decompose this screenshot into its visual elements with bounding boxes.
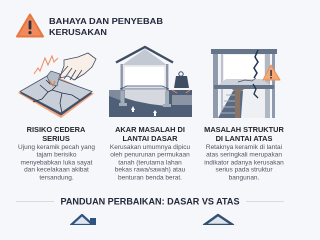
icon: house upper floor — [204, 215, 233, 225]
panel: ground floor text: bekas rawa/sawah) atau — [115, 167, 186, 174]
panel: upper floor text: atas seringkali merupakan — [206, 152, 282, 159]
panel: risk text: RISIKO CEDERA — [27, 125, 86, 134]
panel: upper floor text: Retaknya keramik di lantai — [206, 144, 282, 151]
panel: ground floor text: benturan benda berat. — [118, 175, 182, 182]
icon: house with foundation problem — [109, 47, 192, 117]
panel: ground floor text: AKAR MASALAH DI — [115, 125, 185, 134]
title: BAHAYA DAN PENYEBAB — [49, 16, 163, 26]
panel: ground floor text: tanah (terutama lahan — [118, 159, 182, 166]
panel: ground floor text: Kerusakan umumnya dipicu — [110, 144, 190, 151]
panel: risk text: SERIUS — [42, 134, 70, 143]
panel: risk text — [18, 125, 95, 182]
panel: ground floor text: LANTAI DASAR — [123, 134, 178, 143]
title line 2: KERUSAKAN — [49, 27, 107, 37]
icon: two-storey building with cracks — [211, 49, 280, 118]
panel: risk text: Ujung keramik pecah yang — [18, 144, 95, 151]
panel: risk text: tajam berisiko — [36, 152, 77, 159]
section heading: PANDUAN PERBAIKAN: DASAR VS ATAS — [60, 196, 240, 206]
panel: risk text: tersandung. — [39, 175, 74, 182]
panel: risk text: dan kecelakaan akibat — [24, 167, 89, 174]
icon: warning triangle — [17, 14, 43, 36]
panel: upper floor text: serius pada struktur — [215, 167, 273, 174]
panel: upper floor text: bangunan. — [229, 175, 260, 182]
panel: upper floor text: MASALAH STRUKTUR — [204, 125, 284, 134]
panel: risk text: menyebabkan luka sayat — [21, 159, 93, 166]
panel: ground floor text — [110, 125, 190, 182]
panel: ground floor text: oleh penurunan permukaan — [110, 152, 190, 159]
icon: cracked tile and hand — [18, 53, 96, 118]
panel: upper floor text — [204, 125, 284, 182]
panel: upper floor text: DI LANTAI ATAS — [216, 134, 272, 143]
panel: upper floor text: indikator adanya kerusakan — [204, 159, 284, 166]
icon: house ground floor — [71, 215, 96, 225]
